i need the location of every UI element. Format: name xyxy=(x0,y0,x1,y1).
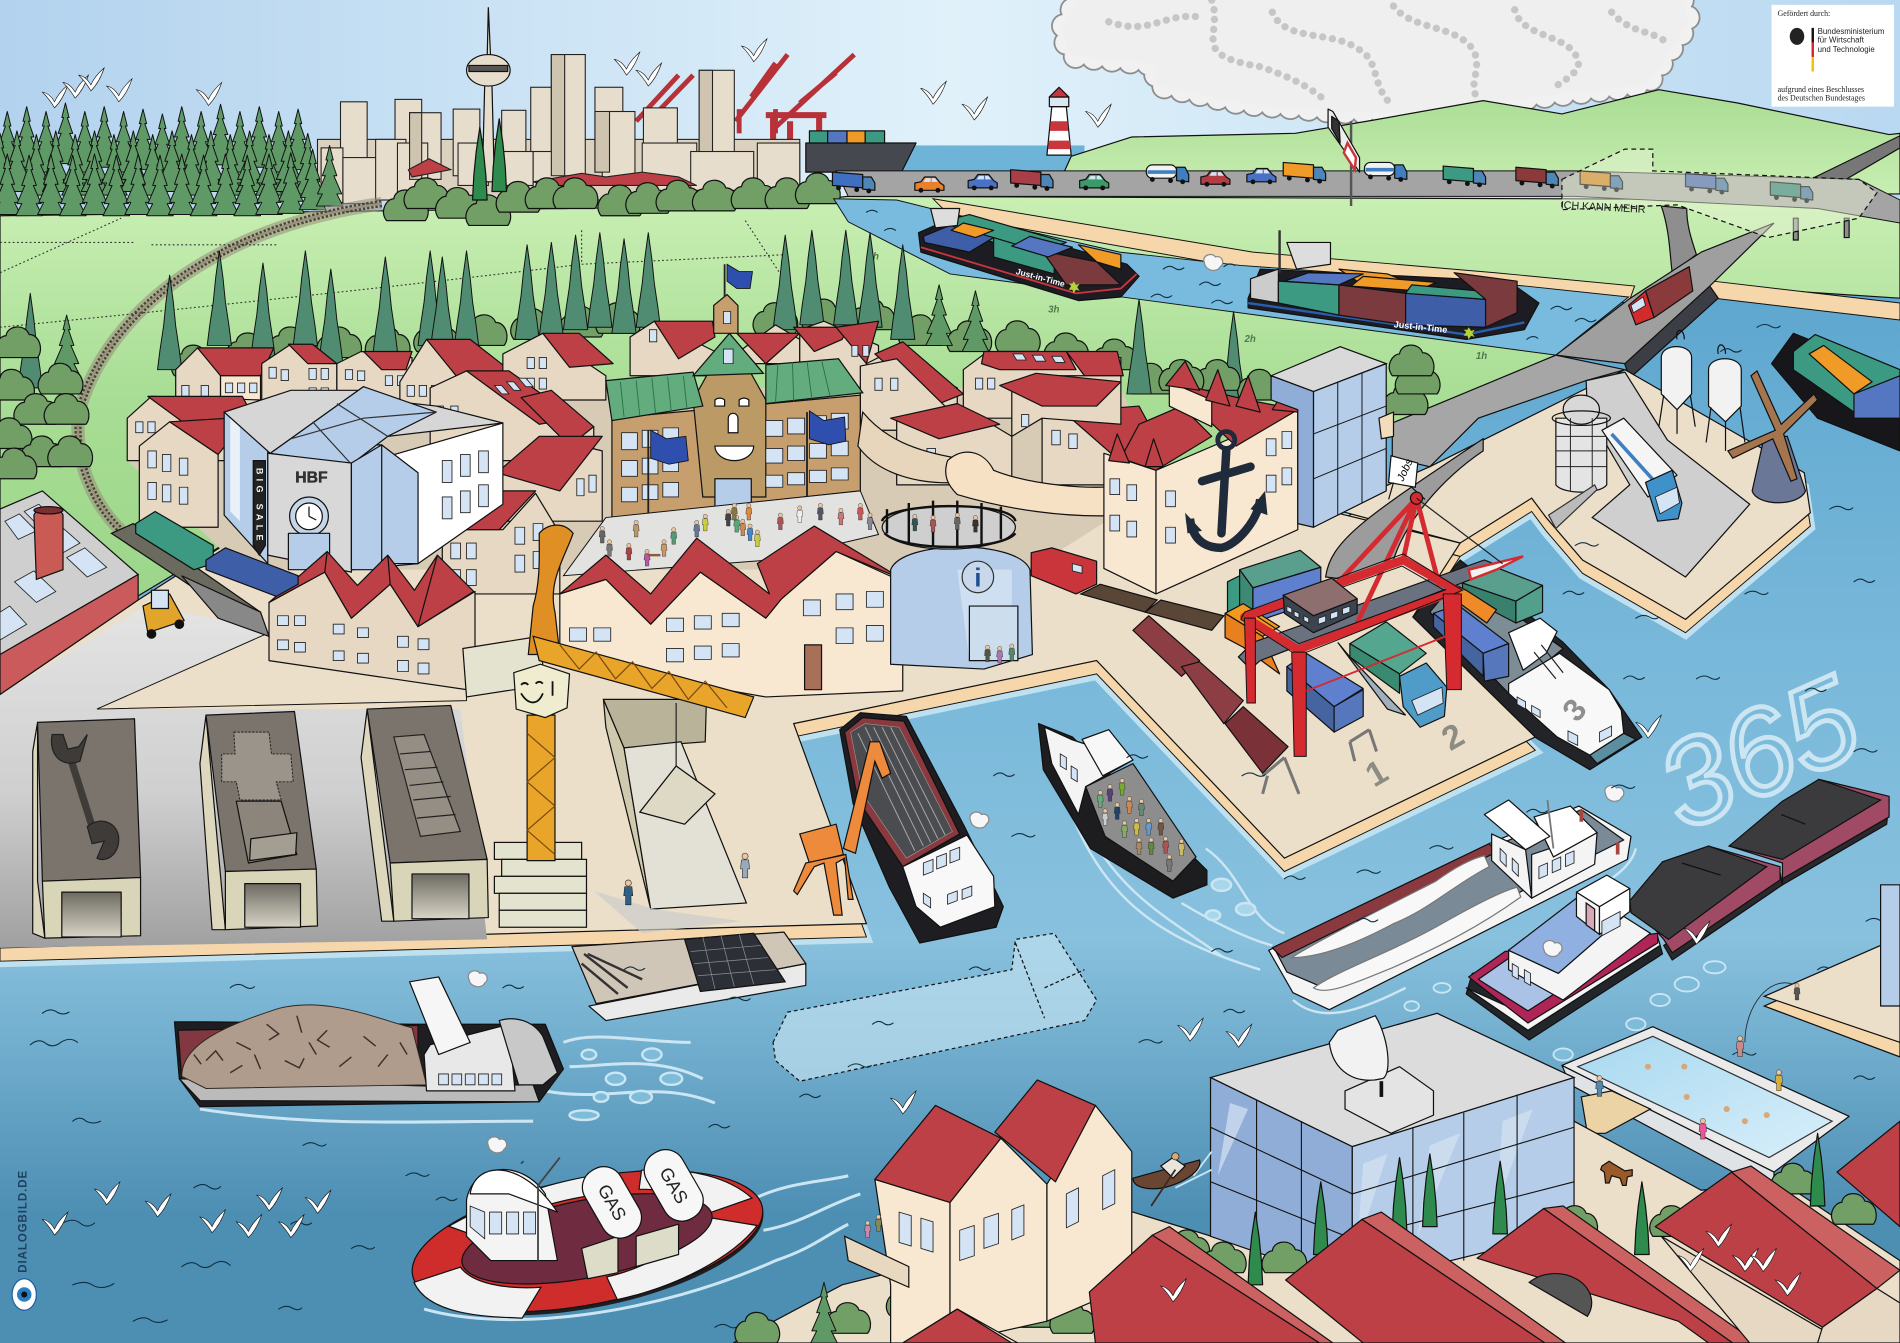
house xyxy=(1042,406,1163,485)
satellite building xyxy=(1211,1013,1574,1285)
container ship on the horizon xyxy=(806,131,916,172)
barge: Just-in-Time, 3h: Just-in-Time xyxy=(1015,266,1066,289)
sand and shoreline of the main land xyxy=(0,383,1810,962)
barge: Just-in-Time, 2h xyxy=(1248,230,1539,339)
house xyxy=(630,321,715,376)
right field strip and shore xyxy=(1672,281,1900,320)
city skyline xyxy=(317,55,800,204)
house xyxy=(497,436,602,521)
info tower xyxy=(882,501,1032,669)
railway station HBF: HBF xyxy=(295,469,328,486)
highway xyxy=(836,136,1900,240)
hand and Jobs sign xyxy=(1379,412,1425,499)
coal barges xyxy=(1630,779,1889,960)
workers xyxy=(624,853,750,905)
town background block xyxy=(127,388,1163,570)
small sea on the horizon xyxy=(903,145,1085,176)
funding logo box: für Wirtschaft xyxy=(1818,35,1865,44)
pool xyxy=(1562,1027,1849,1194)
quay numbers: 2 xyxy=(1435,716,1471,758)
Dialogbild logo xyxy=(12,1171,36,1310)
anchor building xyxy=(1104,361,1299,594)
house xyxy=(176,348,274,418)
concrete block stack xyxy=(494,842,586,927)
concrete yard xyxy=(0,606,487,948)
roof xyxy=(1655,1166,1900,1343)
roof xyxy=(1089,1227,1333,1343)
dog xyxy=(1601,1161,1632,1185)
gantry crane xyxy=(1238,492,1523,756)
funding logo box: aufgrund eines Beschlusses xyxy=(1778,85,1864,94)
passenger ship xyxy=(1038,724,1284,970)
ghost barge dashed outline xyxy=(773,933,1097,1081)
road sign xyxy=(1328,109,1360,206)
funding logo box: Bundesministerium xyxy=(1818,27,1885,36)
dotted field boundaries xyxy=(0,218,788,327)
house xyxy=(866,342,963,418)
lighthouse xyxy=(1047,87,1071,155)
barge at right edge xyxy=(1772,333,1900,451)
roof xyxy=(903,1309,1018,1343)
house xyxy=(503,333,613,400)
canal hour marks xyxy=(867,251,1487,362)
canal hour marks: 2h xyxy=(1243,334,1256,345)
field xyxy=(0,196,1900,606)
gas boat: GAS xyxy=(594,1181,630,1224)
front houses with three gables xyxy=(269,552,475,691)
house xyxy=(1000,373,1121,436)
warehouse shelves xyxy=(361,705,488,921)
dashed ghost lane: I can do more xyxy=(1561,149,1877,238)
gas boat: GAS xyxy=(655,1164,692,1207)
funding logo box: und Technologie xyxy=(1818,45,1875,54)
tank truck xyxy=(1602,418,1682,521)
foreground house with balcony xyxy=(845,1080,1132,1343)
silos xyxy=(1659,330,1745,451)
orange harbour crane xyxy=(794,742,891,915)
flags xyxy=(648,264,846,530)
train with containers and forklift xyxy=(111,512,298,639)
bottom land xyxy=(733,1121,1900,1343)
house xyxy=(430,371,594,461)
barge: Just-in-Time, 2h: Just-in-Time xyxy=(1393,319,1448,335)
barge: Just-in-Time, 3h xyxy=(918,208,1139,301)
house xyxy=(442,491,560,594)
crowd on the square xyxy=(599,503,873,566)
ship with containers, number 3 xyxy=(1413,560,1642,770)
red harbour cranes xyxy=(636,55,854,179)
tower crane with smile xyxy=(514,525,754,861)
foreground trees xyxy=(735,1133,1876,1343)
canal hour marks: 4h xyxy=(867,251,879,262)
town square xyxy=(563,491,879,576)
scrap barge xyxy=(174,971,715,1122)
highway traffic xyxy=(832,162,1558,193)
lower quay with pier on the right xyxy=(1745,885,1900,1057)
funding logo box: des Deutschen Bundestages xyxy=(1778,94,1865,103)
railway station HBF xyxy=(224,387,503,572)
foreground red roofs xyxy=(903,1121,1900,1343)
house xyxy=(891,404,1012,485)
windmill xyxy=(1728,371,1818,503)
refinery tower xyxy=(1549,395,1610,528)
funding logo box: Gefördert durch: xyxy=(1778,9,1830,18)
barge with pipes xyxy=(840,713,1003,943)
front houses right of square xyxy=(560,526,903,697)
funding logo box xyxy=(1772,5,1894,107)
TV tower xyxy=(467,7,510,182)
dashed ghost lane: I can do more: ICH KANN MEHR xyxy=(1561,199,1646,216)
warehouse wrench xyxy=(33,719,141,938)
warehouse box xyxy=(200,711,317,930)
canal xyxy=(834,199,1635,355)
roof xyxy=(1286,1212,1566,1343)
rower xyxy=(1133,1151,1212,1206)
house xyxy=(400,339,509,418)
left forest xyxy=(0,103,343,216)
house xyxy=(337,352,412,406)
house xyxy=(860,359,957,430)
water xyxy=(0,279,1900,1343)
quay numbers: 1 xyxy=(1359,752,1394,795)
factory at left xyxy=(0,491,138,695)
canal hour marks: 3h xyxy=(1048,305,1060,316)
waves xyxy=(30,324,1889,1328)
bushes below skyline xyxy=(384,119,840,225)
water 365: 365 xyxy=(1638,649,1879,856)
construction pit xyxy=(594,699,746,933)
hand and Jobs sign: Jobs xyxy=(1395,457,1416,484)
highway ramp and bridge xyxy=(1556,206,1774,378)
railway curve xyxy=(78,204,382,545)
town hall xyxy=(606,295,863,518)
land xyxy=(0,370,1810,948)
house xyxy=(963,352,1123,418)
locomotive and wagons xyxy=(1031,548,1377,794)
town: back row houses xyxy=(127,321,1163,594)
blue truck under crane xyxy=(1338,622,1447,727)
red truck on bridge xyxy=(1629,267,1693,325)
foam around boats xyxy=(1404,961,1726,1061)
house xyxy=(139,417,248,527)
gas boat xyxy=(400,1137,860,1341)
beige triangle lot xyxy=(97,633,467,709)
stone block on yard xyxy=(463,636,545,697)
roof xyxy=(1477,1206,1757,1343)
wind blade barge xyxy=(1269,785,1636,1013)
smoke cloud xyxy=(1061,0,1689,114)
canal hour marks: 1h xyxy=(1476,351,1487,362)
house xyxy=(127,396,261,461)
house xyxy=(794,321,879,388)
forest behind the town xyxy=(0,230,1440,479)
ship with containers, number 3: 3 xyxy=(1555,691,1594,728)
road to the tank pier xyxy=(1326,355,1750,579)
pusher boat xyxy=(1466,875,1662,1040)
arms and handshake xyxy=(858,412,1133,516)
house xyxy=(262,344,337,418)
house xyxy=(737,325,800,364)
Dialogbild logo: DIALOGBILD.DE xyxy=(18,1171,30,1273)
green hills xyxy=(1054,90,1900,194)
roof xyxy=(1837,1121,1900,1227)
platform with steel mesh xyxy=(572,932,806,1021)
glass tower xyxy=(1271,347,1386,527)
info tower: i xyxy=(974,565,981,593)
quay numbers xyxy=(1359,716,1471,795)
railway station HBF: BIG SALE xyxy=(254,468,264,541)
stacked containers left of crane xyxy=(1225,550,1363,732)
sky xyxy=(0,0,1900,267)
